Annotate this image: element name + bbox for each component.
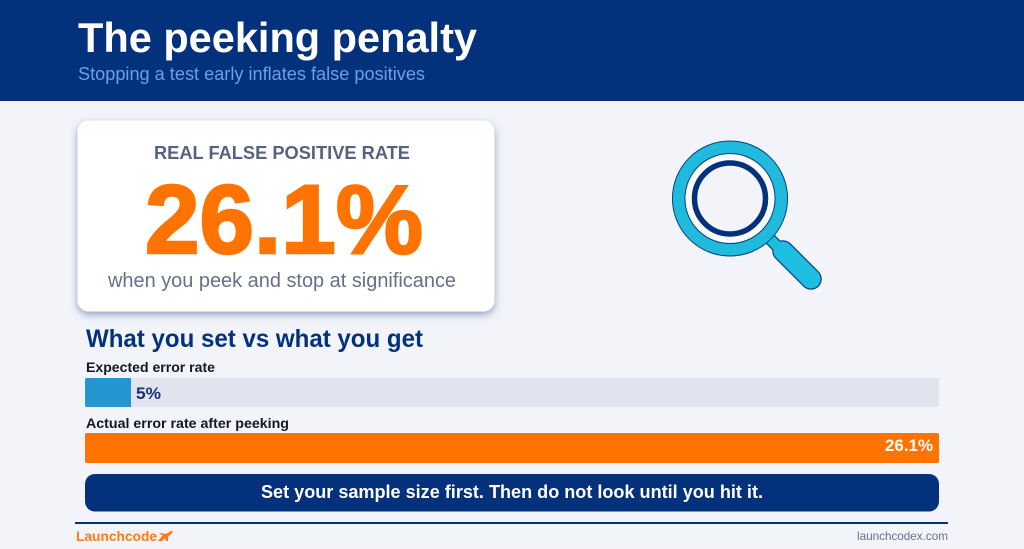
- bar value: 5%: 5%: [136, 384, 161, 403]
- subtitle: Stopping a test early inflates false positives: [78, 64, 425, 84]
- panel: key stat card: [78, 120, 494, 312]
- icon: magnifying glass: [679, 147, 811, 279]
- section heading: What you set vs what you get: [86, 325, 424, 353]
- icon: plane: [158, 531, 173, 541]
- bar chart: expected error rate: [85, 359, 939, 407]
- stat caption: when you peek and stop at significance: [107, 270, 456, 292]
- header banner: [0, 0, 1024, 101]
- bar value: 26.1%: 26.1%: [885, 436, 933, 455]
- footer: [75, 522, 948, 544]
- callout: Set your sample size first. Then do not look until you hit it.: [261, 482, 763, 502]
- bar chart: actual error rate: [85, 415, 939, 463]
- website: launchcodex.com: [857, 529, 948, 543]
- callout: [85, 474, 939, 512]
- title: The peeking penalty: [78, 14, 478, 61]
- stat label: REAL FALSE POSITIVE RATE: [154, 142, 410, 163]
- bar label: expected: Expected error rate: [86, 359, 215, 375]
- stat value: 26.1%: [145, 165, 423, 274]
- logo: Launchcode: [76, 528, 157, 544]
- bar label: actual: Actual error rate after peeking: [86, 415, 289, 431]
